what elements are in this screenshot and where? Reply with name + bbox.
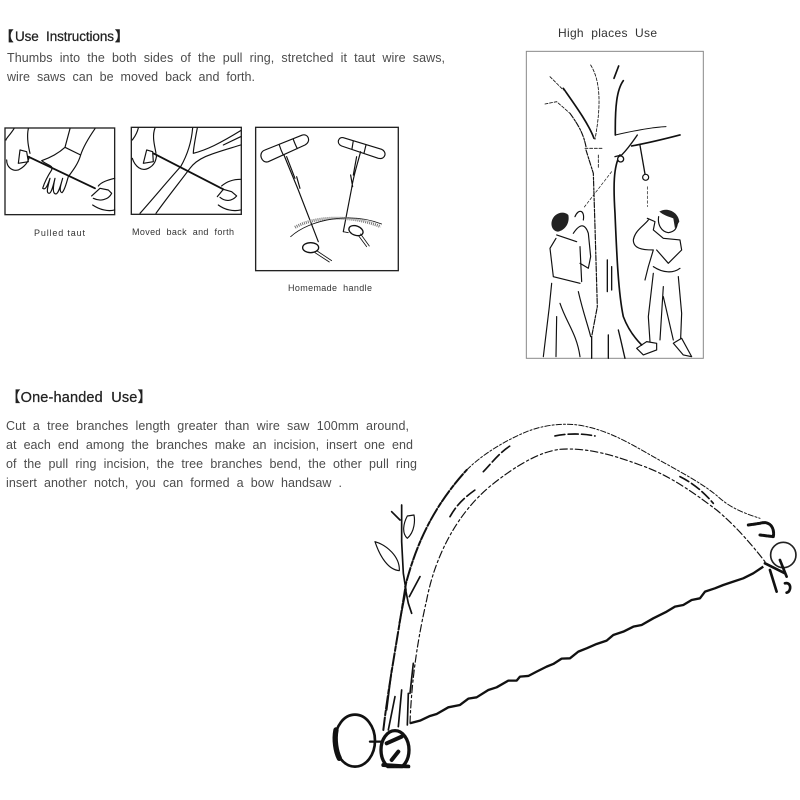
saw wire xyxy=(153,153,223,189)
heading: Use Instructions: 】 xyxy=(115,29,128,44)
text block: one-handed use: insert another notch, you can formed a bow handsaw . xyxy=(6,476,342,490)
icon: left hand holding ring xyxy=(6,129,30,170)
icon: right T-handle xyxy=(338,138,385,159)
text block: one-handed use xyxy=(6,419,417,490)
icon: right hand xyxy=(217,179,241,211)
icon: pull rings xyxy=(303,224,369,262)
icon: forked branch xyxy=(140,128,241,213)
icon: left T-handle xyxy=(261,135,309,162)
caption: Pulled taut: Pulled taut xyxy=(34,228,85,238)
text block: one-handed use: at each end among the branches make an incision, insert one end xyxy=(6,438,413,452)
left wire xyxy=(284,155,318,242)
text block: use instructions: wire saws can be moved back and forth. xyxy=(6,70,255,84)
saw wire xyxy=(410,567,763,723)
text block: use instructions: Thumbs into the both sides of the pull ring, stretched it taut wire saws, xyxy=(7,51,445,65)
right pull ring and knot xyxy=(748,523,796,593)
text block: one-handed use: of the pull ring incision, the tree branches bend, the other pull ring xyxy=(6,457,417,471)
text block: use instructions xyxy=(6,51,445,84)
panel: moved back and forth illustration xyxy=(131,127,241,214)
left pull ring xyxy=(335,715,409,769)
saw rope and rings xyxy=(615,135,637,157)
panel: pulled taut illustration xyxy=(5,128,115,215)
caption: Moved back and forth: Moved back and forth xyxy=(132,227,234,237)
icon: left man xyxy=(543,211,591,357)
heading: Use Instructions: 【 xyxy=(0,29,14,44)
illustration: bow handsaw xyxy=(335,424,796,769)
icon: right hand xyxy=(92,178,115,211)
icon: left hand xyxy=(132,128,157,169)
panel: high places illustration xyxy=(526,51,703,358)
text block: one-handed use: Cut a tree branches length greater than wire saw 100mm around, xyxy=(6,419,409,433)
heading: High places Use: High places Use xyxy=(558,26,657,40)
panel: homemade handle illustration xyxy=(256,127,398,271)
icon: tree xyxy=(545,65,680,358)
icon: middle hand xyxy=(42,129,95,194)
right wire xyxy=(343,152,361,232)
caption: Homemade handle: Homemade handle xyxy=(288,283,372,293)
heading: Use Instructions: Use Instructions xyxy=(15,29,114,44)
icon: right man xyxy=(633,210,692,357)
arc of tree trunk xyxy=(291,218,382,237)
side twig and leaves xyxy=(375,505,414,623)
branch bow xyxy=(383,424,765,730)
heading: One-handed Use: 【One-handed Use】 xyxy=(6,389,152,406)
saw wire xyxy=(28,157,95,188)
